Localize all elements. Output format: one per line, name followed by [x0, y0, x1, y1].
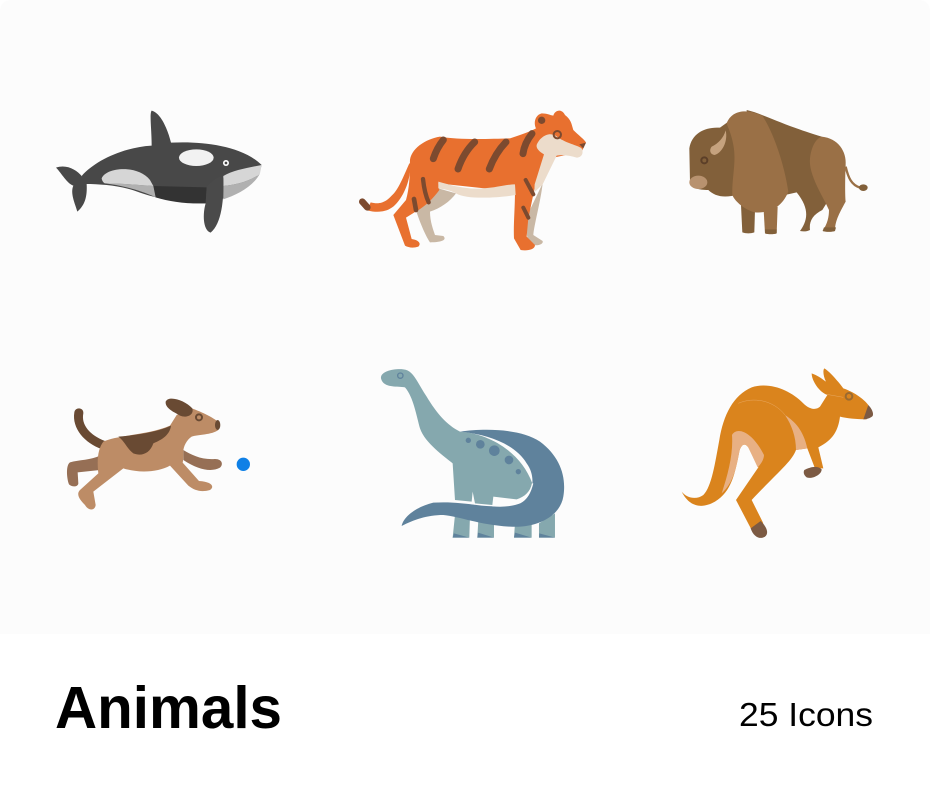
icon: bison	[689, 110, 868, 234]
icon: dinosaur	[381, 369, 564, 538]
icon: running dog with ball	[67, 399, 250, 509]
icon: orca	[56, 111, 262, 233]
icon count: 25 Icons	[739, 696, 873, 733]
title: Animals	[55, 675, 282, 741]
icon: blue ball	[237, 458, 250, 471]
icon: kangaroo	[682, 368, 873, 538]
icon: tiger	[362, 111, 586, 250]
